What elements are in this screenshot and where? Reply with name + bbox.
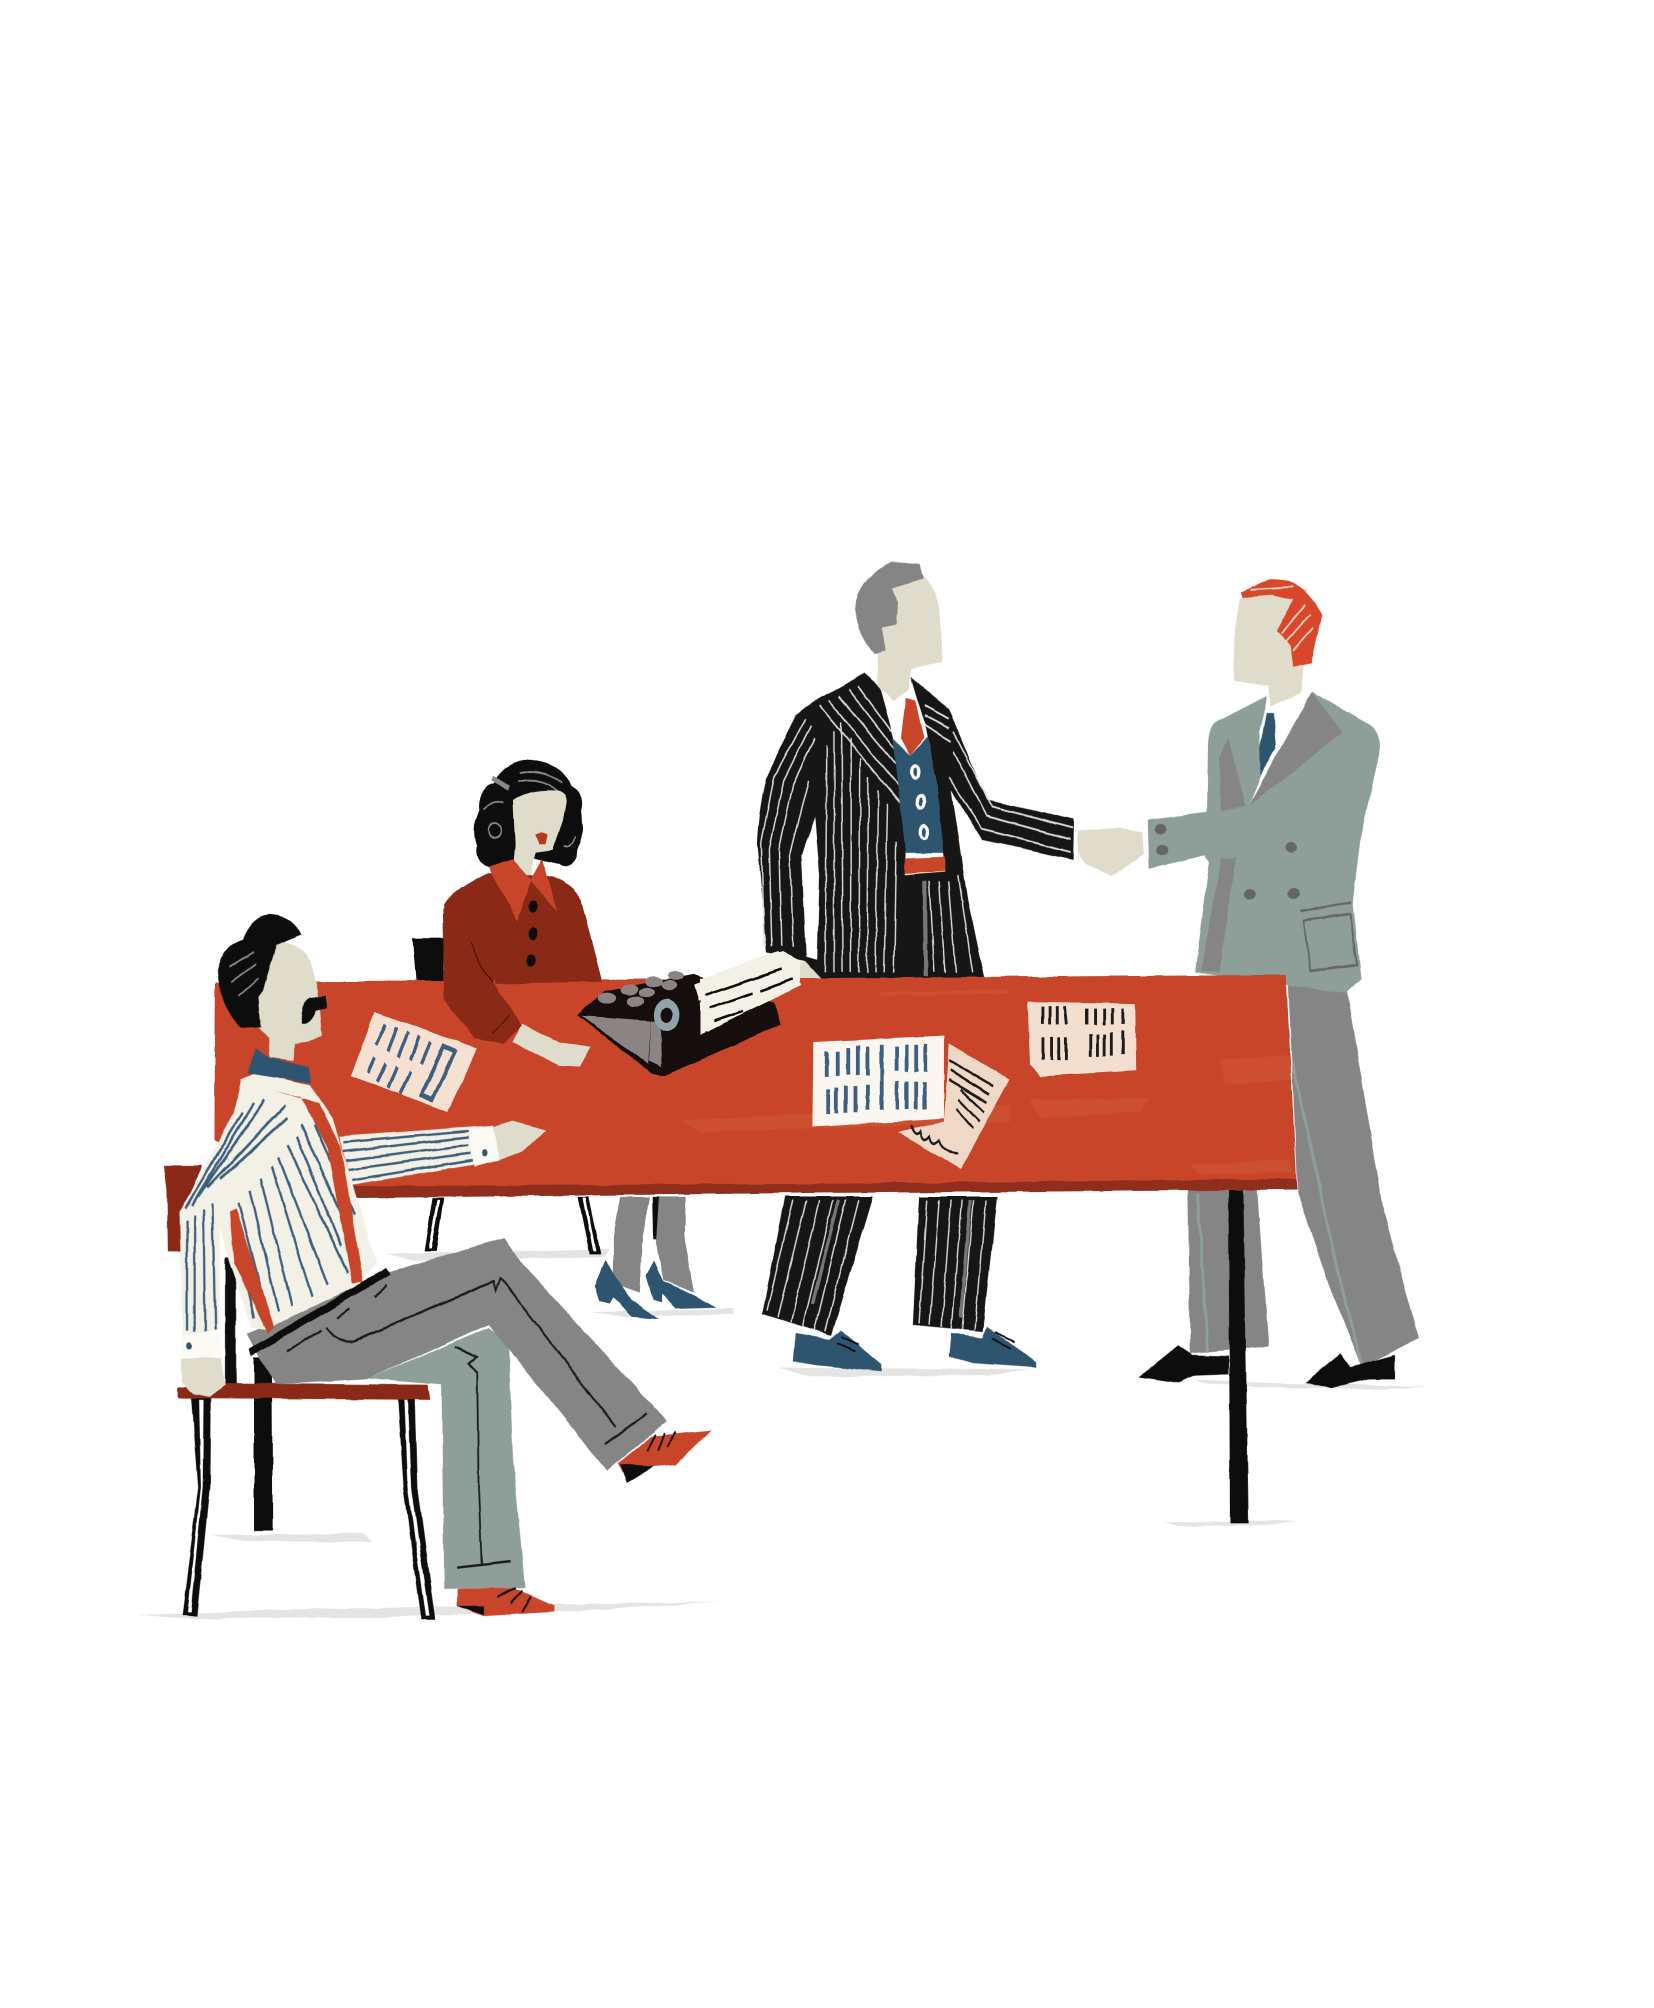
seated man: cuff buttons [187, 1150, 487, 1350]
pinstripe man: shirt [877, 672, 926, 739]
grey-suit man: lapels and shading [1201, 691, 1342, 972]
items on the table, frame B [812, 1002, 1136, 1169]
figures behind the table, frame A [412, 759, 717, 1319]
seated man: lower shoe [457, 1588, 554, 1616]
pinstripe man: jacket [757, 673, 1074, 979]
grey-suit man: tie [1260, 713, 1276, 775]
seated man: belt [250, 1268, 390, 1356]
seated man: raised shoe [618, 1430, 712, 1483]
woman's chair [412, 938, 601, 1254]
seated man: collar [247, 1048, 311, 1083]
pinstripe man: chalk stripes [761, 686, 1073, 972]
typewriter [578, 971, 781, 1076]
seated man: arm stripes [343, 1131, 473, 1180]
pinstripe man: tie [901, 698, 924, 756]
seated man: right hand [493, 1121, 546, 1160]
seated man: shirt [179, 1073, 377, 1336]
pinstripe man: hair [854, 561, 924, 654]
grey-suit man: buttons [1155, 824, 1299, 899]
woman: legs and shoes [595, 1197, 717, 1319]
seated man: left hand [182, 1357, 225, 1397]
pinstripe man: shoes [793, 1327, 1037, 1372]
seated man: head [256, 942, 322, 1048]
seated man: hair highlights [229, 951, 258, 997]
grey-suit man: front trouser leg [1288, 984, 1419, 1367]
seated man: cuffs [182, 1125, 500, 1359]
seated man: seat [178, 1383, 430, 1400]
grey-suit man: jacket [1148, 691, 1379, 993]
grey-suit man: trouser seams [1197, 1063, 1362, 1366]
grey-suit man: shirt [1259, 686, 1302, 774]
table top [214, 975, 1297, 1198]
typewriter paper [694, 951, 800, 1032]
pinstripe man: belt [905, 857, 945, 873]
man in pinstripe suit: trouser legs [762, 1197, 998, 1335]
floor shadows [138, 1249, 1427, 1619]
seated man's chair [164, 1165, 436, 1620]
seated man: moustache [301, 996, 326, 1024]
seated man: trouser lines [287, 1279, 647, 1444]
seated man: right arm [339, 1125, 500, 1185]
grey-suit man: pocket [1300, 902, 1356, 971]
seated man: suspenders [229, 1091, 363, 1333]
seated man, frame A [164, 915, 712, 1620]
table: left rear leg and chair post [254, 1357, 273, 1530]
grey-suit man: hair hatching [1250, 587, 1313, 650]
pinstripe man: shoe laces [836, 1332, 1015, 1351]
contract with signature [897, 1044, 1009, 1169]
woman: hair [474, 759, 583, 867]
seated man: upper trouser leg [247, 1238, 667, 1471]
pinstripe man: hand on table [796, 958, 835, 982]
woman: face and neck [513, 790, 567, 879]
seated man: lower leg [368, 1327, 525, 1589]
grey-suit man: head and neck [1233, 589, 1307, 707]
woman: buttons [527, 901, 538, 981]
pinstripe man: neck and head [877, 572, 942, 700]
typewriter paper end [700, 952, 802, 1034]
paper on the left of the table [351, 1012, 477, 1112]
seated man: crease [455, 1347, 511, 1568]
seated man: shirt stripes [185, 1100, 354, 1331]
seated man: hair [217, 915, 301, 1028]
grey-suit man: back trouser leg [1188, 1190, 1268, 1354]
seated man: neck [267, 1012, 296, 1061]
grey-suit man: red hair [1241, 579, 1322, 667]
pinstripe man: waistcoat and buttons [892, 737, 944, 853]
pink sheet with black columns [1028, 1002, 1136, 1076]
table brush streaks [680, 990, 1292, 1175]
items and figures over the table, frame A [351, 909, 800, 1112]
woman: sleeve and arm over table [443, 909, 602, 1067]
woman: collar [488, 859, 558, 921]
grey-suit man: shoes [1139, 1345, 1394, 1389]
pinstripe man: trouser crease [920, 881, 930, 976]
woman: blouse [444, 873, 602, 1003]
handshake hands [1078, 828, 1144, 877]
woman: lips [535, 832, 549, 844]
white document with blue columns [812, 1036, 944, 1127]
right table leg [1229, 1190, 1249, 1523]
standing men, frame B [757, 561, 1419, 1523]
woman: hair grip and comb lines [484, 771, 575, 846]
